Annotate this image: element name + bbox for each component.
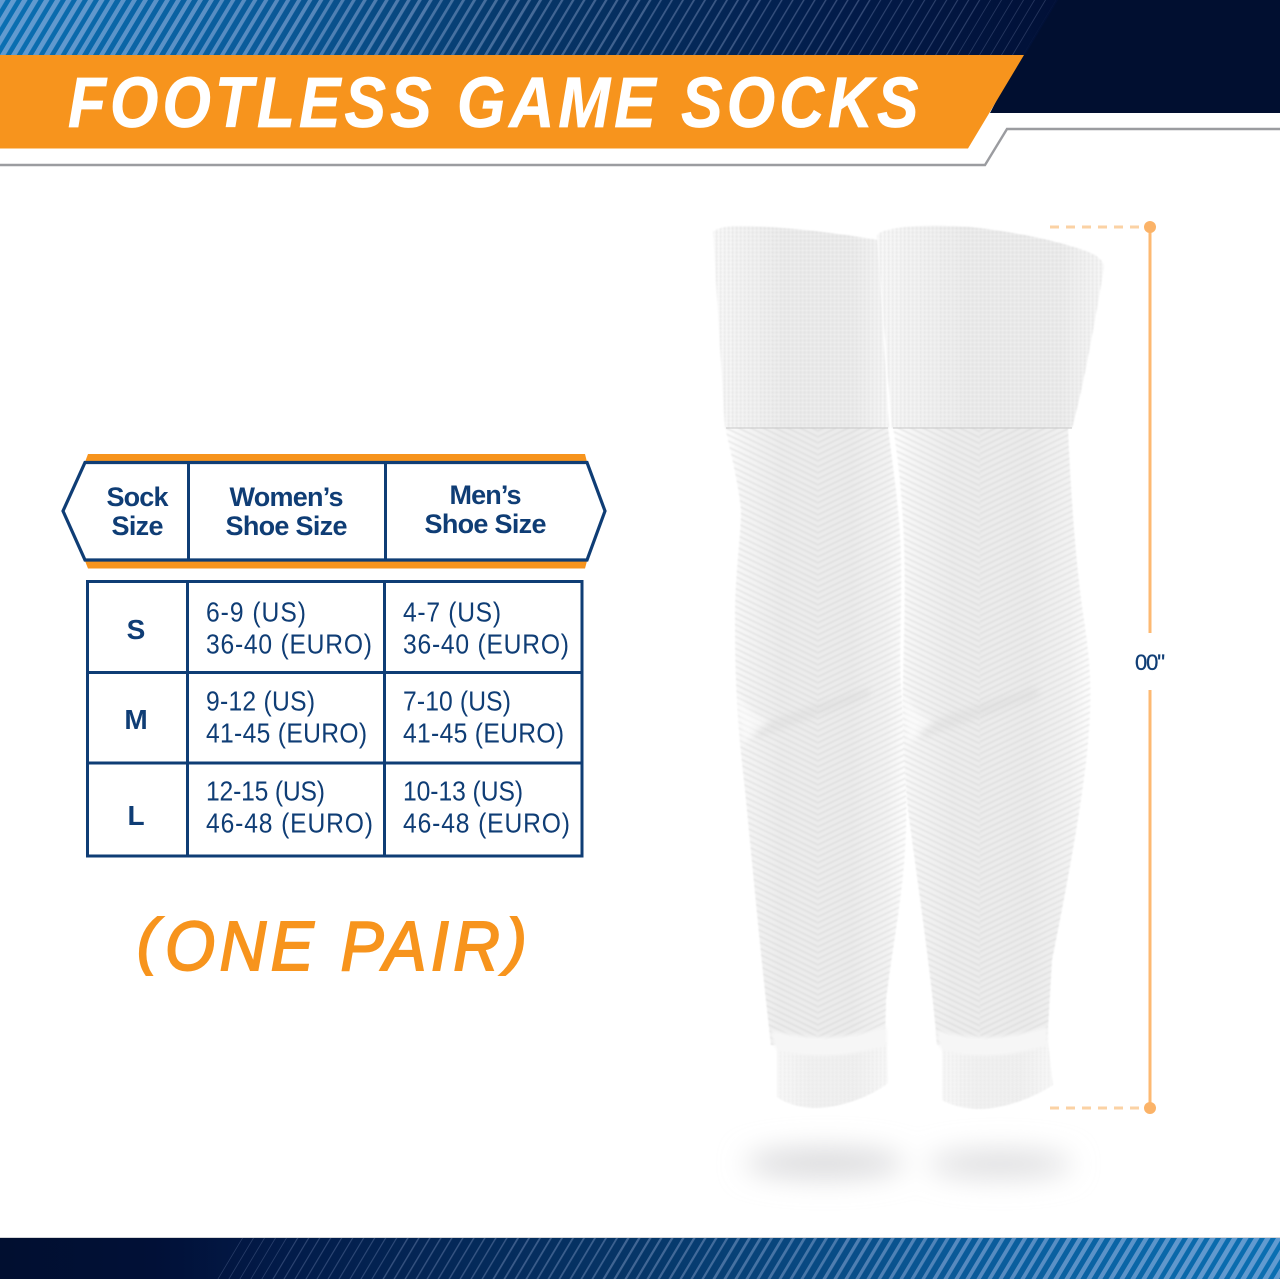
column heading: men's shoe size: Men’s — [450, 480, 522, 510]
row M — [124, 685, 564, 749]
row L: 12-15 (US) — [206, 775, 325, 807]
size chart — [63, 454, 605, 856]
column heading: sock size: Size — [112, 511, 164, 541]
row M: M — [124, 704, 148, 735]
dashed guides — [1050, 227, 1140, 1108]
table body — [88, 582, 582, 856]
product photo: pair of white socks — [713, 226, 1104, 1109]
column heading: women's shoe size: Women’s — [230, 482, 344, 512]
left ankle ribbing — [777, 1042, 888, 1108]
height dimension — [1050, 221, 1165, 1114]
column heading: sock size: Sock — [106, 482, 169, 512]
right leg — [890, 427, 1095, 1047]
end dots — [1144, 221, 1156, 1114]
left cuff — [713, 226, 889, 428]
row S: 36-40 (EURO) — [206, 628, 372, 660]
table header — [63, 454, 605, 568]
row L — [127, 775, 570, 839]
column heading: men's shoe size: Shoe Size — [424, 509, 546, 539]
one pair label: ) — [499, 907, 527, 976]
right ankle ribbing — [942, 1042, 1053, 1109]
right sock — [877, 226, 1104, 1109]
row S: 4-7 (US) — [403, 596, 501, 628]
row L: L — [127, 800, 145, 831]
footer stripes — [217, 1238, 1280, 1279]
header outline — [63, 462, 605, 560]
right folded band — [937, 1026, 1048, 1056]
dimension value: 00" — [1135, 650, 1165, 675]
orange header accents — [85, 454, 587, 568]
row L: 46-48 (EURO) — [403, 807, 570, 839]
footer band — [0, 1237, 1280, 1279]
header dividers — [188, 462, 386, 560]
row M: 9-12 (US) — [206, 685, 315, 717]
cuff seam lines — [726, 427, 1072, 429]
left folded band — [771, 1026, 887, 1056]
header banner — [0, 0, 1280, 165]
striped blue gradient band — [0, 0, 1058, 55]
left sock — [713, 226, 909, 1108]
row S: 36-40 (EURO) — [403, 628, 569, 660]
row S — [127, 596, 569, 660]
table grid — [88, 582, 582, 856]
row M: 7-10 (US) — [403, 685, 511, 717]
right cuff — [877, 226, 1104, 428]
orange title ribbon — [0, 55, 1024, 148]
row L: 46-48 (EURO) — [206, 807, 373, 839]
title: FOOTLESS GAME SOCKS — [68, 64, 918, 143]
one pair label: ONE PAIR — [165, 908, 500, 986]
row L: 10-13 (US) — [403, 775, 523, 807]
floor shadow — [745, 1149, 1072, 1177]
column heading: women's shoe size: Shoe Size — [226, 511, 348, 541]
dimension line — [1148, 227, 1152, 1108]
left leg — [725, 427, 909, 1047]
row M: 41-45 (EURO) — [206, 717, 367, 749]
row S: 6-9 (US) — [206, 596, 306, 628]
row S: S — [127, 614, 145, 645]
one pair label: ( — [137, 907, 163, 976]
navy corner block — [990, 0, 1280, 113]
row M: 41-45 (EURO) — [403, 717, 564, 749]
grey outline under banner — [0, 129, 1280, 165]
